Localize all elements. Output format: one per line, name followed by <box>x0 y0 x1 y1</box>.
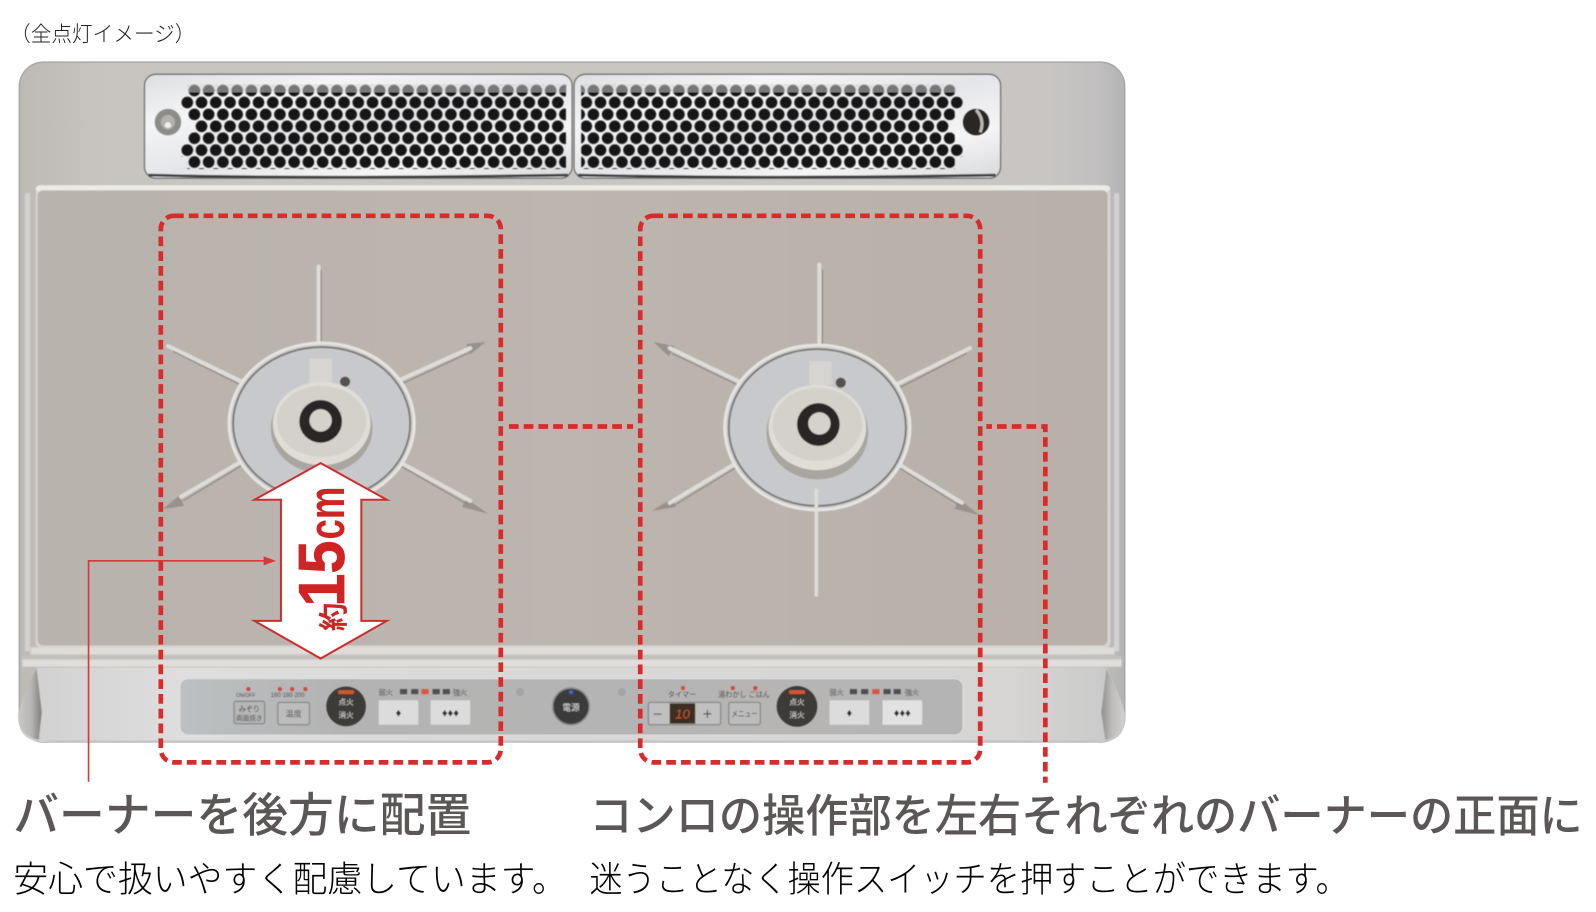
dashed leader to right heading <box>986 426 1045 783</box>
distance label: 15 <box>285 540 358 607</box>
temperature button: 160 180 200 <box>271 692 305 699</box>
dashed connector between boxes <box>509 424 633 429</box>
control panel <box>180 679 963 735</box>
left burner <box>163 267 489 514</box>
heading: controls position: コンロの操作部を左右それぞれのバーナーの正面に <box>589 792 1583 842</box>
right flame level: 強火 <box>905 688 919 697</box>
grill button: 両面焼き <box>236 714 263 723</box>
timer: + <box>703 706 712 724</box>
support tips right <box>651 342 979 515</box>
grill button <box>234 687 265 724</box>
left flame level <box>379 688 467 697</box>
grill button: みぞり <box>239 705 260 713</box>
power button: 電源 <box>562 702 580 712</box>
left corner flare <box>18 669 42 740</box>
pan supports right <box>670 265 970 503</box>
right low button <box>830 700 869 725</box>
distance label: 約 <box>318 603 351 631</box>
temperature button: 温度 <box>286 709 302 719</box>
right low button: ♦ <box>847 708 853 720</box>
heading: burner placement: バーナーを後方に配置 <box>13 790 471 842</box>
dashed box: left burner zone <box>161 216 501 762</box>
left high button: ♦♦♦ <box>442 708 459 720</box>
left dial: 点火 <box>338 697 354 706</box>
left low button <box>379 700 418 725</box>
timer: 10 <box>675 707 690 722</box>
left high button <box>431 700 470 725</box>
vent holes left <box>181 84 566 169</box>
right flame level: 弱火 <box>830 689 844 697</box>
top row glare <box>187 84 955 93</box>
right burner <box>651 265 979 596</box>
right high button: ♦♦♦ <box>894 708 911 720</box>
caption: all-lit image note: （全点灯イメージ） <box>10 23 195 47</box>
right dial <box>777 686 817 727</box>
menu button <box>718 686 770 725</box>
vent grille <box>145 74 1001 178</box>
vent holes right <box>581 84 963 169</box>
front edge strip <box>22 647 1122 667</box>
front support right <box>815 489 818 596</box>
leader arrow to 15cm marker <box>89 556 276 782</box>
screw right <box>963 109 989 135</box>
burner ring right <box>725 345 910 510</box>
vent plate right <box>574 74 1001 178</box>
pan supports left <box>168 267 470 501</box>
vent plate left <box>145 74 572 178</box>
grill button: ON/OFF <box>236 693 255 699</box>
front fascia <box>18 668 1125 742</box>
timer: − <box>653 706 662 724</box>
screw left <box>155 109 181 135</box>
menu button: 湯わかし ごはん <box>718 690 770 699</box>
burner centre left <box>299 400 342 443</box>
distance label <box>285 487 358 631</box>
dashed box: right burner zone <box>640 216 980 762</box>
left dial: 消火 <box>338 710 354 720</box>
right dial: 消火 <box>789 710 805 720</box>
left controls <box>234 687 470 726</box>
support shadows left <box>173 270 470 505</box>
igniter left <box>309 358 332 383</box>
burner cap left <box>271 384 373 473</box>
menu button: メニュー <box>731 710 758 719</box>
distance label: cm <box>298 487 355 539</box>
igniter right <box>809 361 832 385</box>
left dial <box>326 687 366 726</box>
right flame level <box>830 688 919 697</box>
temperature button <box>271 687 309 725</box>
power button <box>516 688 626 725</box>
right dial: 点火 <box>789 697 805 706</box>
timer: タイマー <box>668 690 696 699</box>
burner cap right <box>766 386 868 479</box>
burner centre right <box>797 403 840 446</box>
body: controls position: 迷うことなく操作スイッチを押すことができます。 <box>589 860 1349 900</box>
left low button: ♦ <box>396 708 402 720</box>
side rail highlights <box>27 193 1117 651</box>
support shadows right <box>672 270 967 507</box>
panel surface <box>180 679 963 735</box>
burner ring left <box>229 343 414 504</box>
timer <box>648 686 721 725</box>
left flame level: 強火 <box>453 688 467 697</box>
left flame level: 弱火 <box>379 689 393 697</box>
right corner flare <box>1101 669 1125 740</box>
body: burner placement: 安心で扱いやすく配慮しています。 <box>13 860 567 900</box>
double arrow: about 15cm <box>254 463 387 659</box>
cooktop outer frame <box>19 62 1125 742</box>
cooking plate <box>36 185 1110 649</box>
right high button <box>882 700 922 725</box>
cooktop photo <box>18 62 1125 743</box>
right controls <box>648 686 922 727</box>
fascia bottom edge <box>47 740 1099 743</box>
support tips left <box>163 342 489 514</box>
